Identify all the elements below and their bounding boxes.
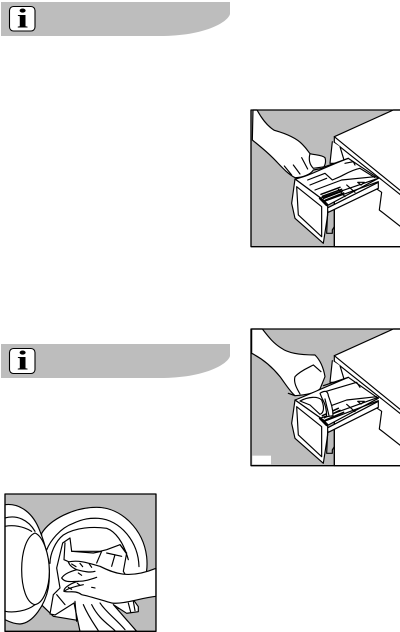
icon: information: i	[17, 346, 29, 376]
background	[251, 329, 400, 466]
drawer top	[295, 377, 378, 425]
hands and arm	[62, 561, 156, 603]
panel: first note banner	[1, 2, 230, 36]
drawer top	[295, 158, 378, 205]
drawer underside	[327, 401, 378, 432]
background	[251, 110, 400, 247]
drawer front	[292, 179, 328, 243]
hand	[252, 110, 326, 178]
frame	[251, 329, 400, 466]
siphon	[320, 391, 333, 417]
banner shape	[1, 2, 230, 36]
frame	[251, 110, 400, 247]
drawer front	[292, 400, 328, 463]
background	[5, 494, 156, 631]
icon: information: i	[17, 4, 29, 34]
drawer underside	[327, 182, 378, 212]
icon: information	[10, 346, 35, 376]
washing machine body	[334, 329, 400, 466]
laundry	[50, 538, 138, 631]
illustration: hand lifting siphon from drawer	[251, 329, 400, 466]
illustration: hands removing laundry from drum	[5, 494, 156, 631]
banner shape	[1, 344, 230, 378]
icon: information	[10, 4, 35, 34]
washing machine body	[334, 110, 400, 247]
frame	[5, 494, 156, 631]
hand and arm	[252, 329, 325, 396]
illustration: hand pulling out detergent drawer	[251, 110, 400, 247]
open door	[5, 504, 49, 624]
panel: second note banner	[1, 344, 230, 378]
drum opening rings	[40, 507, 147, 621]
label patch	[252, 456, 271, 464]
